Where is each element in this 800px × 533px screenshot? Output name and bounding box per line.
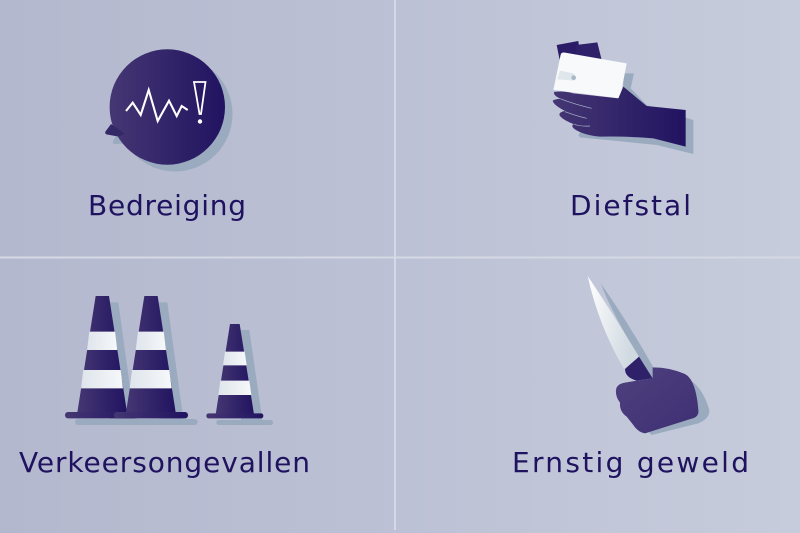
cone: small bbox=[206, 324, 263, 418]
cone shadows bbox=[75, 302, 273, 425]
icon: hand with knife bbox=[588, 276, 709, 435]
label: Verkeersongevallen: Verkeersongevallen bbox=[19, 446, 310, 479]
panel: Bedreiging bbox=[88, 49, 246, 222]
cone: second bbox=[114, 296, 188, 418]
icon: hand holding wallet bbox=[553, 41, 693, 154]
label: Ernstig geweld: Ernstig geweld bbox=[512, 446, 749, 479]
panel: Verkeersongevallen bbox=[19, 296, 310, 479]
panel: Ernstig geweld bbox=[512, 276, 749, 479]
panel: Diefstal bbox=[553, 41, 693, 222]
icon: traffic cones bbox=[65, 296, 273, 425]
icon: speech bubble with alarm signal bbox=[105, 49, 232, 171]
cone: first bbox=[65, 296, 139, 418]
label: Bedreiging: Bedreiging bbox=[88, 189, 246, 222]
label: Diefstal: Diefstal bbox=[570, 189, 691, 222]
